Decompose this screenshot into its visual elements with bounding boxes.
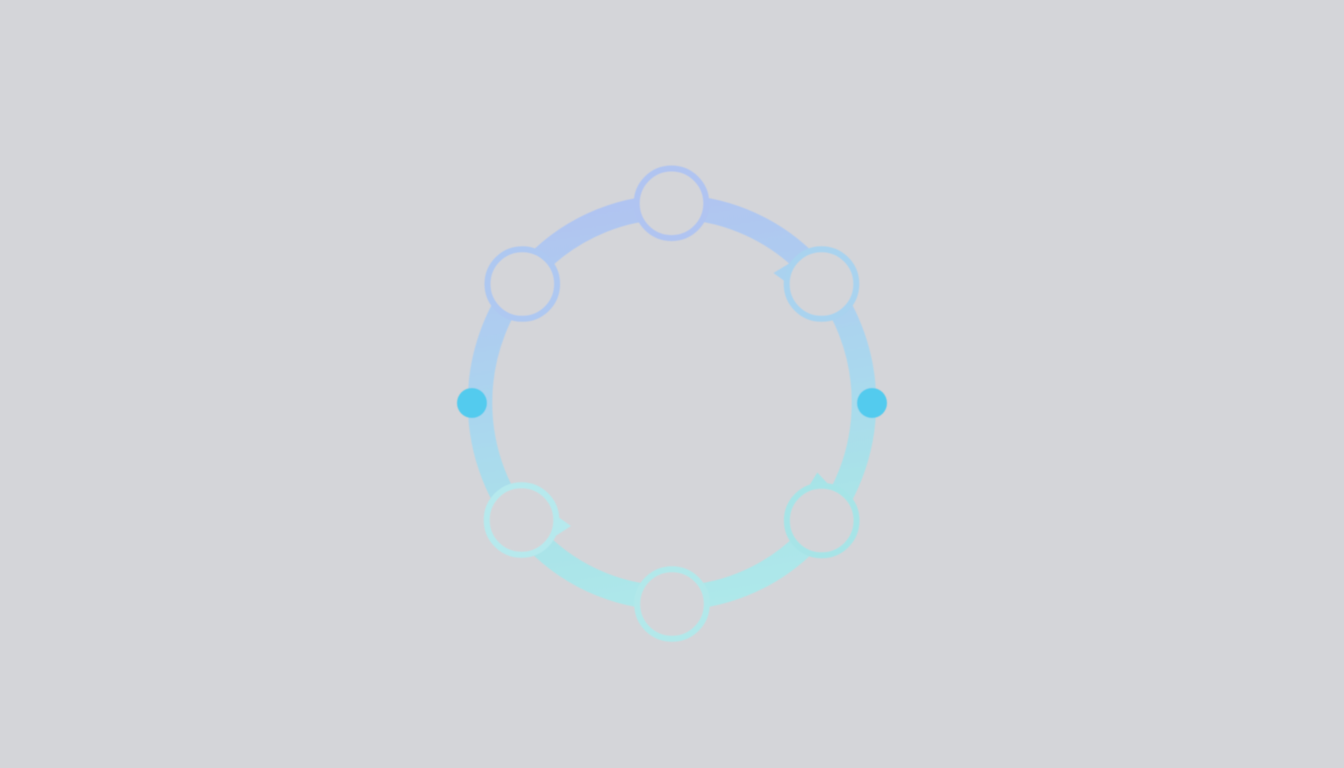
node: lower right: [787, 486, 856, 555]
arrow: lower left: [554, 514, 571, 537]
node: upper right: [787, 249, 856, 319]
node: bottom: [637, 569, 707, 639]
dot: left: [457, 388, 487, 418]
arrow: upper right: [774, 263, 794, 288]
node: upper left: [488, 249, 557, 319]
ring with nodes and dots: [457, 168, 887, 639]
gradient ring: [480, 207, 864, 598]
dot: right: [857, 388, 887, 418]
node: top: [637, 168, 706, 238]
node: lower left: [487, 485, 556, 555]
arrow: lower right: [809, 472, 830, 486]
